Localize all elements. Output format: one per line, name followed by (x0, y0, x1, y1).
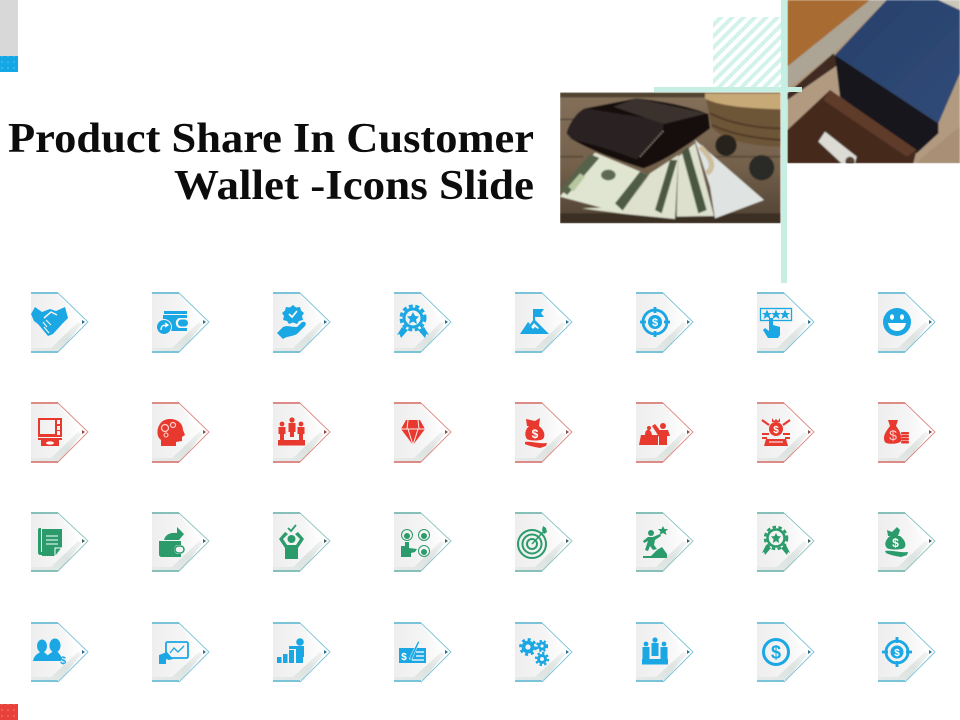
icon badge: diamond (394, 403, 451, 462)
icon badge: dollar target: $ (652, 317, 658, 329)
icon badge: hand pointing to chart (152, 623, 209, 682)
title: Wallet -Icons Slide (174, 163, 534, 209)
icon badge: wallet with arrow (152, 513, 209, 571)
icon badge: gears (515, 623, 572, 682)
corner accent: bottom left (0, 704, 18, 720)
icon badge: dollar crest: $ (773, 425, 779, 436)
row 3: green icons (31, 513, 935, 571)
icon badge: bars and person (273, 623, 330, 682)
icon badge: wallet share (152, 293, 209, 352)
photo: wallet and banknotes (560, 92, 781, 223)
icon badge: money bag and coins: $ (889, 427, 897, 443)
icon badge: dollar target (636, 293, 693, 352)
icon badge: money bag on hand: $ (532, 427, 539, 441)
icon badge: money bag and coins (878, 403, 935, 462)
icon badge: hand with seal (273, 293, 330, 352)
title (8, 116, 534, 209)
icon badge: money bag on hand (515, 403, 572, 462)
icon badge: person at table (636, 403, 693, 462)
icon badge: dollar circle (757, 623, 814, 682)
icon badge: two people with dollar (31, 623, 88, 682)
icon badge: climber reaching star (636, 513, 693, 571)
icon badge: podium team (273, 403, 330, 462)
icon badge: head with gears (152, 403, 209, 462)
corner accent: top left (0, 0, 18, 72)
icon badge: documents (31, 513, 88, 571)
icon badge: mountain flag (515, 293, 572, 352)
icon badge: dollar target: $ (894, 648, 900, 659)
icon badge: hand selecting people (394, 513, 451, 571)
striped decoration (713, 17, 781, 88)
icon badge: ribbon award (394, 293, 451, 352)
icon badge: ATM machine (31, 403, 88, 462)
icon badge: two people with dollar: $ (60, 655, 66, 667)
title: Product Share In Customer (8, 116, 534, 162)
icon badge: smiley (878, 293, 935, 352)
icon badge: star rating (757, 293, 814, 352)
icon badge: target with arrow (515, 513, 572, 571)
icon badge: cheque and pen (394, 623, 451, 682)
icon badge: person with checkmark (273, 513, 330, 571)
icon badge: dollar crest (757, 403, 814, 462)
row 2: red icons (31, 403, 935, 462)
icon badge: dollar target (878, 623, 935, 682)
icon badge: cheque and pen: $ (401, 652, 407, 663)
icon badge: ribbon award green (757, 513, 814, 571)
row 1: blue icons (31, 293, 935, 352)
photo: leather wallets and blue box (787, 0, 960, 166)
icon badge: money bag on hand green: $ (892, 536, 899, 550)
mint cross lines (654, 0, 802, 283)
icon badge: dollar circle: $ (771, 642, 781, 662)
row 4: blue icons (31, 623, 935, 682)
icon badge: podium team blue (636, 623, 693, 682)
icon badge: handshake (31, 293, 88, 352)
icon badge: money bag on hand green (878, 513, 935, 571)
